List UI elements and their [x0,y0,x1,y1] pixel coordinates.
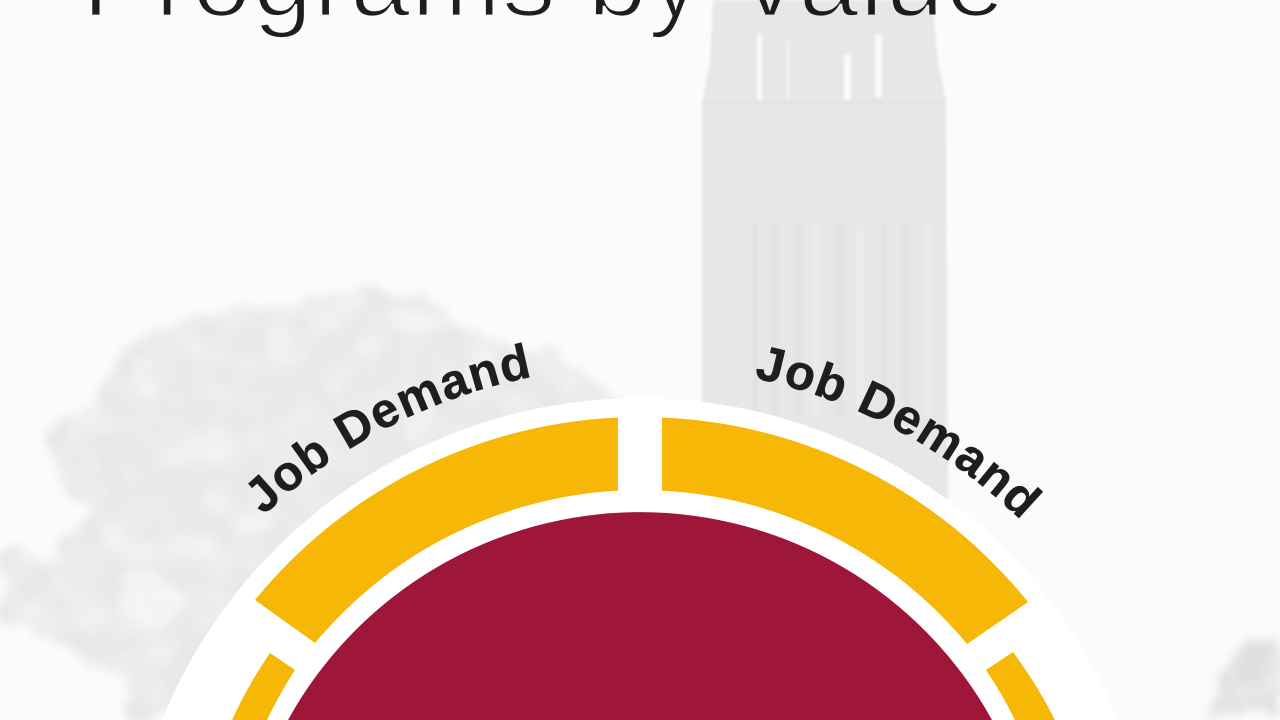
background: bell tower [702,0,948,500]
value wheel [162,398,1118,720]
wheel: segment lower left [232,653,295,720]
label: Job Demand right: Job Demand [756,347,1044,518]
background: tree silhouette [0,282,640,719]
wheel: maroon centre [288,512,992,720]
background: small tree bottom right [1205,635,1279,719]
label: Job Demand left: Job Demand [248,342,530,512]
wheel: segment lower right [986,652,1055,720]
wheel: segment top left [255,418,618,643]
wheel: white backing disc [162,398,1118,720]
wheel: segment top right [662,418,1028,644]
